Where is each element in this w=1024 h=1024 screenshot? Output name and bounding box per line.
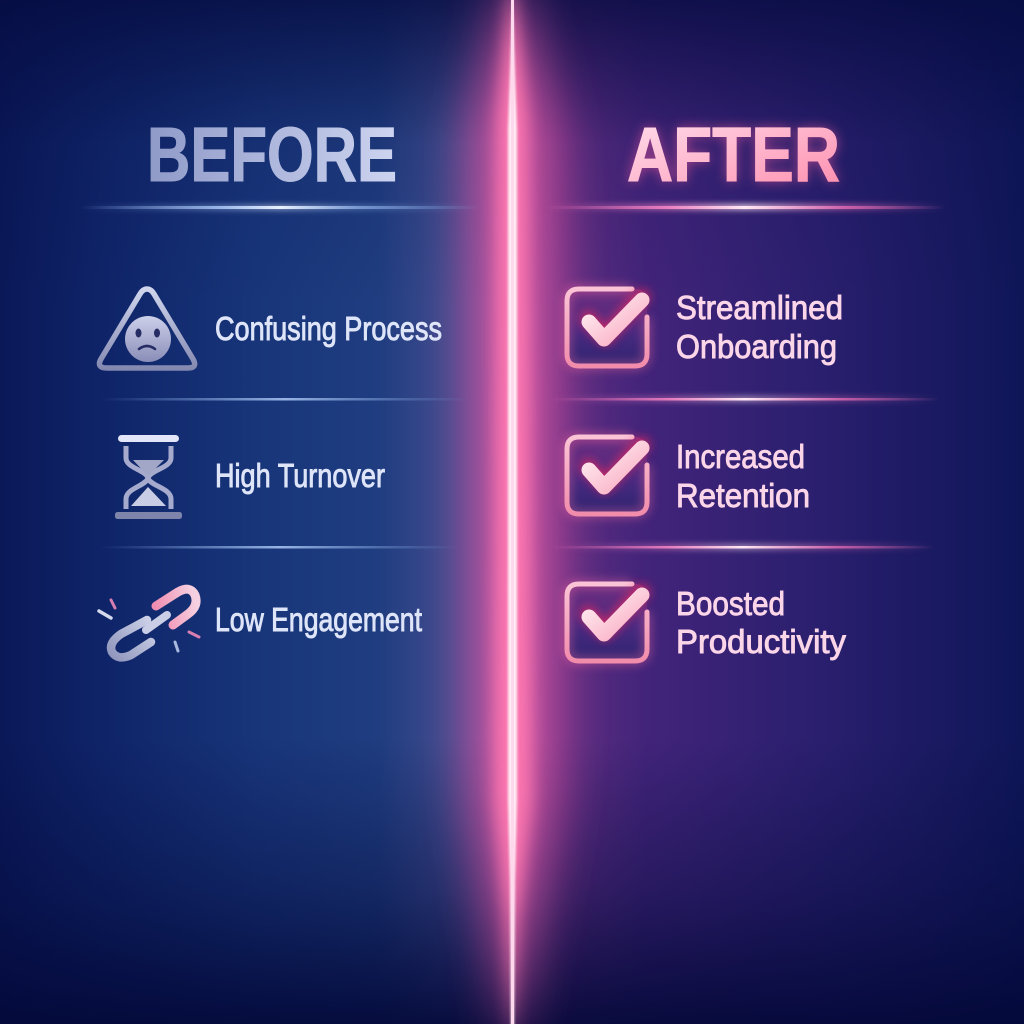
heading: BEFORE: BEFORE	[147, 112, 397, 198]
divider: before heading	[80, 205, 480, 210]
divider: row 1 right	[550, 396, 940, 402]
label: Increased Retention	[676, 438, 810, 514]
label: Increased Retention: Retention	[676, 477, 810, 514]
label: Streamlined Onboarding	[676, 289, 843, 365]
label: Low Engagement: Low Engagement	[215, 601, 422, 638]
icon: checkbox 3	[567, 584, 647, 661]
heading: AFTER: AFTER	[627, 112, 840, 198]
icon: hourglass	[115, 435, 182, 519]
icon: warning triangle with sad face	[99, 289, 195, 368]
label: High Turnover: High Turnover	[215, 457, 385, 494]
label: Boosted Productivity	[676, 585, 846, 660]
label: Streamlined Onboarding: Onboarding	[676, 328, 837, 365]
icon: checkbox 2	[567, 437, 647, 514]
central glowing divider	[470, 0, 558, 1024]
label: Boosted Productivity: Boosted	[676, 585, 785, 622]
divider: row 2 right	[550, 544, 935, 550]
heading: AFTER: AFTER	[627, 112, 840, 198]
divider: row 2 left	[100, 546, 460, 548]
icon: checkbox 1	[567, 289, 647, 366]
icon: broken chain link	[99, 589, 199, 657]
label: Boosted Productivity: Productivity	[676, 623, 846, 660]
label: Confusing Process: Confusing Process	[215, 310, 442, 347]
label: Increased Retention: Increased	[676, 438, 805, 475]
divider: row 1 left	[100, 398, 470, 400]
label: Streamlined Onboarding: Streamlined	[676, 289, 843, 326]
divider: after heading	[545, 204, 945, 210]
